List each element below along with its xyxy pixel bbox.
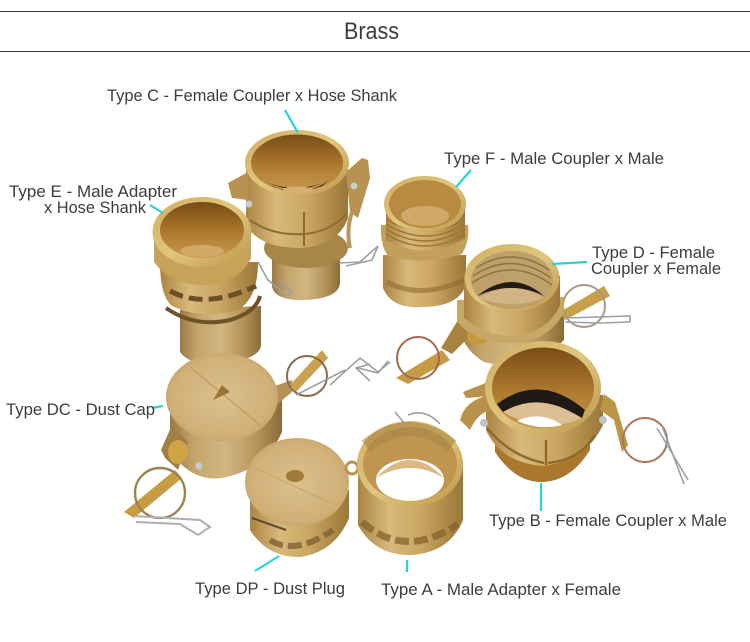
label: Type D: Coupler x Female bbox=[591, 259, 721, 278]
label: Type D: Type D - Female bbox=[592, 243, 715, 262]
label: Type E: x Hose Shank bbox=[44, 198, 146, 217]
label: Type C: Type C - Female Coupler x Hose Shank bbox=[107, 86, 397, 105]
coupling: Type DP dust plug bbox=[245, 438, 358, 557]
coupling: Type E bbox=[152, 197, 261, 364]
label: Type E bbox=[9, 182, 177, 217]
coupling: Type C bbox=[228, 130, 378, 300]
label: Type D bbox=[591, 243, 721, 278]
label: Type A: Type A - Male Adapter x Female bbox=[381, 580, 621, 599]
label: Type B: Type B - Female Coupler x Male bbox=[489, 511, 727, 530]
coupling: Type D bbox=[356, 244, 630, 384]
label: Type DP: Type DP - Dust Plug bbox=[195, 579, 345, 598]
coupling: Type F bbox=[381, 176, 468, 307]
label: Type E: Type E - Male Adapter bbox=[9, 182, 177, 201]
coupling: Type DC dust cap bbox=[124, 350, 390, 535]
leader lines bbox=[150, 110, 587, 572]
label: Type F: Type F - Male Coupler x Male bbox=[444, 149, 664, 168]
coupling: Type A bbox=[357, 412, 463, 555]
label: Type DC: Type DC - Dust Cap bbox=[6, 400, 155, 419]
coupling: Type B bbox=[460, 341, 688, 484]
title: Brass bbox=[344, 18, 399, 45]
